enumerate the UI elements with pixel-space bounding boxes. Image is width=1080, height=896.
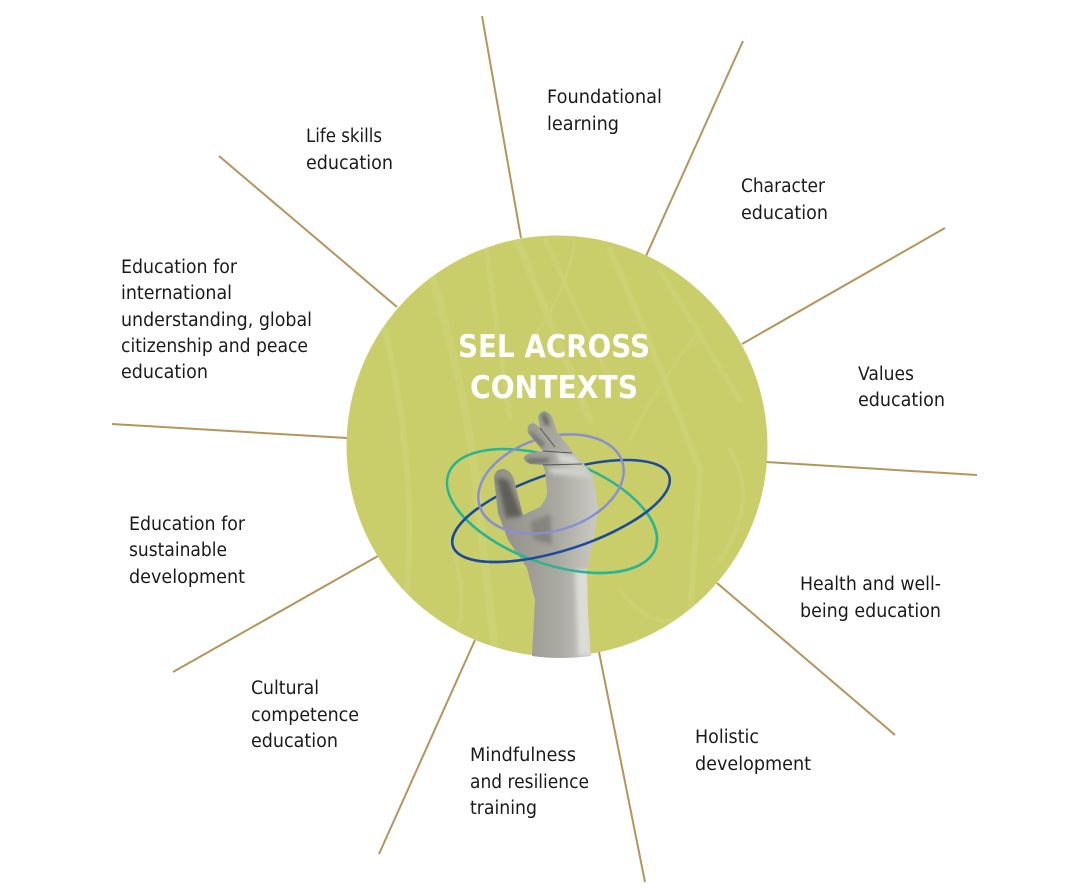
label: Cultural competence education: Cultural [251,678,319,699]
label: Education for international understanding, global citizenship and peace education: education [121,362,208,383]
label: Life skills education: Life skills [306,126,382,147]
label: Education for international understanding, global citizenship and peace education: citizenship and peace [121,336,308,357]
title: CONTEXTS [470,370,638,406]
label: Cultural competence education: competence [251,705,359,726]
label: Health and well-being education: Health and well- [800,574,941,595]
label: Mindfulness and resilience training: training [470,798,537,819]
title: SEL ACROSS [458,329,650,365]
label: Life skills education: education [306,153,393,174]
label: Holistic development: Holistic [695,727,759,748]
label: Education for international understanding, global citizenship and peace education: Education for [121,257,237,278]
label: Education for sustainable development: Education for [129,514,245,535]
label: Life skills education [306,126,393,174]
label: Education for sustainable development: development [129,567,245,588]
radiating lines [112,16,977,882]
label: Character education [741,176,828,224]
label: Character education: Character [741,176,825,197]
label: Cultural competence education: education [251,731,338,752]
label: Holistic development [695,727,811,775]
label: Education for international understanding, global citizenship and peace education [121,257,312,383]
label: Mindfulness and resilience training [470,745,589,819]
label: Holistic development: development [695,754,811,775]
label: Health and well-being education: being education [800,601,941,622]
label: Character education: education [741,203,828,224]
label: Foundational learning: Foundational [547,87,662,108]
label: Education for international understanding, global citizenship and peace education: international [121,283,232,304]
label: Values education: education [858,390,945,411]
label: Cultural competence education [251,678,359,752]
central circle [346,235,768,656]
label: Health and well-being education [800,574,941,622]
label: Foundational learning [547,87,662,135]
label: Education for sustainable development: sustainable [129,540,227,561]
label: Education for sustainable development [129,514,245,588]
label: Mindfulness and resilience training: and resilience [470,772,589,793]
label: Mindfulness and resilience training: Mindfulness [470,745,576,766]
label: Values education [858,364,945,411]
label: Education for international understanding, global citizenship and peace education: understanding, global [121,310,312,331]
infographic: SEL across contexts [112,16,978,882]
label: Values education: Values [858,364,914,385]
title [458,329,650,406]
hand with orbit rings [431,411,681,658]
label: Foundational learning: learning [547,114,619,135]
